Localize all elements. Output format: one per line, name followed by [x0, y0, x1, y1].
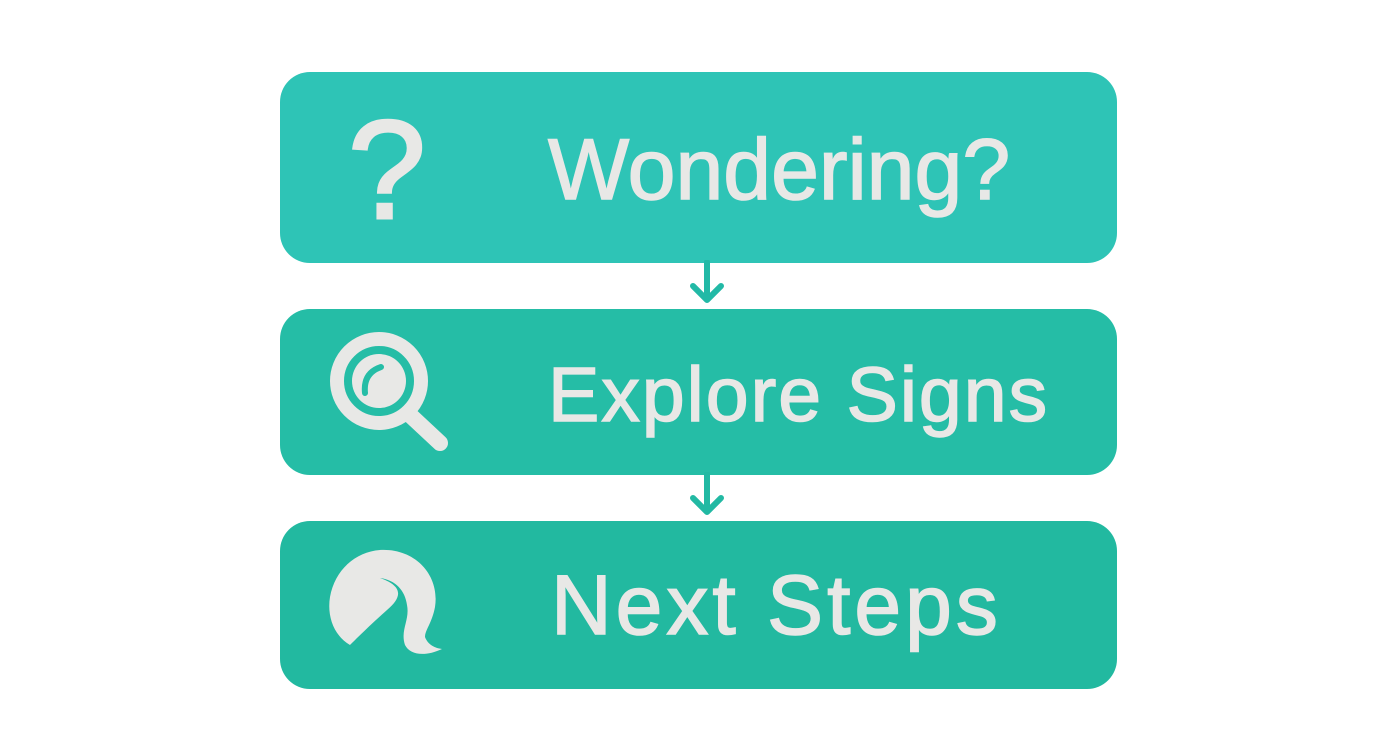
panel: explore signs [280, 309, 1117, 475]
icon: magnifier [330, 332, 448, 451]
arrow 2 [690, 475, 724, 515]
icon: question mark: ? [348, 91, 427, 248]
icon: curved path [329, 550, 442, 654]
panel: wondering [280, 72, 1117, 263]
heading: Explore Signs: Explore Signs [548, 352, 1049, 438]
heading: Next Steps: Next Steps [551, 558, 1002, 652]
arrow 1 [690, 260, 724, 303]
heading: Wondering?: Wondering? [548, 122, 1010, 218]
panel: next steps [280, 521, 1117, 689]
